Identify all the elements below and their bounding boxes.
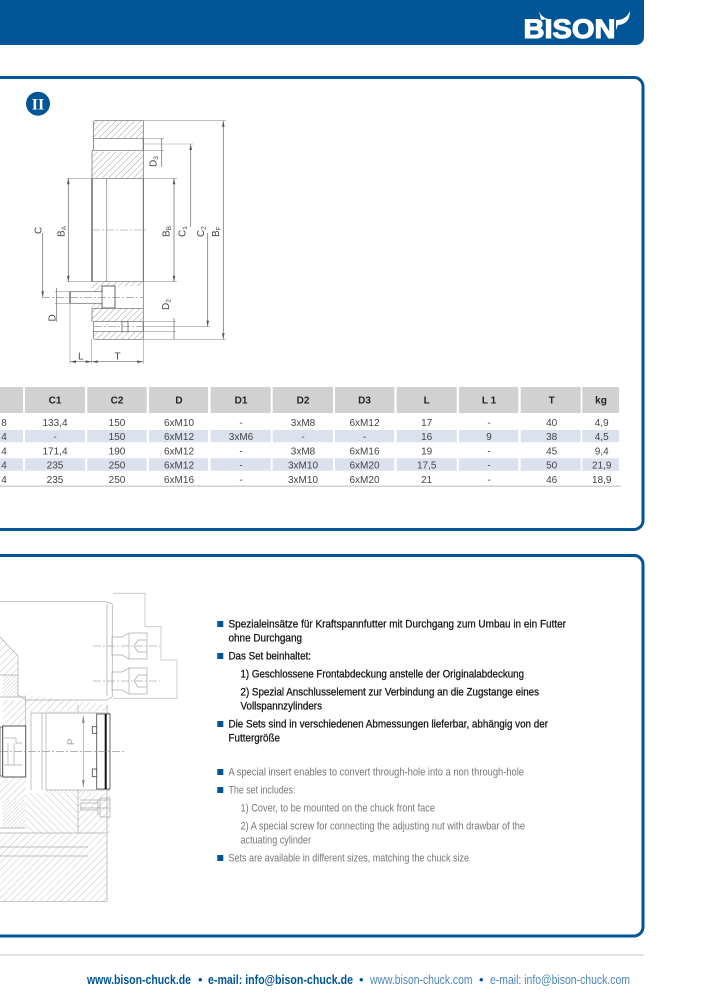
dimension labels: T [114,352,121,362]
row 4: 6xM20 [349,460,380,472]
header bar [0,0,644,45]
row 1: - [487,418,491,429]
row 5: 6xM20 [349,475,380,486]
dimension labels: B [162,230,172,237]
row 1: 17 [421,418,433,429]
row 3: 6xM12 [164,446,194,457]
technical drawing: chuck section [42,121,148,339]
footer rule [0,954,644,956]
row 2: - [53,432,57,443]
row 3: 190 [109,446,126,457]
row 2: - [301,432,305,443]
row 4: 6xM12 [164,460,194,472]
dimension labels: 1 [182,226,189,230]
footer links: e-mail: info@bison-chuck.de [208,972,353,987]
table header: T [549,396,555,406]
row 3: 3xM8 [291,446,316,457]
dimension labels: F [216,226,222,230]
English lines: A special insert enables to convert through-hole into a non through-hole [228,766,524,778]
English lines: Sets are available in different sizes, matching the chuck size [228,852,469,864]
table header: C2 [111,396,124,406]
badge: II: II [32,96,44,114]
row 3: 45 [546,446,558,457]
jaw screws [93,633,160,694]
row 2: 150 [109,432,126,443]
row 1: 4,9 [595,418,609,429]
row 2: 4,5 [595,432,609,443]
German lines: ohne Durchgang [228,633,302,645]
dimension labels: A [61,225,68,230]
bullet [217,769,223,775]
panel: description [0,556,643,936]
German lines: Vollspannzylinders [240,700,322,712]
German lines: 1) Geschlossene Frontabdeckung anstelle der Originalabdeckung [240,669,524,681]
chuck outlines [0,602,112,902]
table header: D [175,396,183,406]
dimension P: P [66,739,77,745]
connecting screw [0,726,26,777]
footer links: • [359,972,364,987]
dimension labels: 2 [200,226,208,230]
row 1: - [239,418,243,429]
row 1: 8 [1,418,7,429]
row 1: 6xM10 [164,418,194,429]
row 1: 133,4 [42,418,68,429]
bullet [217,653,223,659]
row 3: - [239,446,243,457]
table header: L 1 [482,396,497,406]
footer links: www.bison-chuck.com [369,972,472,987]
panel: dimensions [0,78,643,530]
row 4: 250 [109,460,126,472]
English lines: 1) Cover, to be mounted on the chuck front face [240,802,435,814]
hatched body sections [0,637,112,902]
dimension labels: D [48,314,58,322]
German lines: Futtergröße [228,733,280,745]
row 2: 4 [1,432,7,443]
footer links: www.bison-chuck.de [86,972,191,987]
table header [0,387,619,413]
bullet [217,621,223,627]
row 5: 21 [421,475,433,486]
row 4: 21,9 [592,460,612,472]
badge: II [26,92,50,116]
black insert cover [92,714,110,789]
row 5: 250 [109,475,126,486]
bullet [217,721,223,727]
dimension P [66,715,85,788]
English lines: actuating cylinder [240,834,311,846]
row 3: 171,4 [42,446,68,457]
row 2: - [363,432,366,443]
dimension labels: 2 [166,299,172,303]
English lines: The set includes: [228,784,296,796]
row 2: 9 [486,432,492,443]
bullet [217,855,223,861]
table header: kg [595,396,607,406]
table header: D1 [235,396,248,406]
dimension labels: C [34,227,44,234]
row 4: 50 [546,460,558,472]
row 2 [1,432,609,443]
row 1 [1,418,609,429]
row 2: 38 [546,432,558,443]
row 4: 3xM10 [288,460,318,472]
row 3: - [487,446,491,457]
row 5: 46 [546,475,558,486]
row 3: 19 [421,446,433,457]
table header: L [424,396,430,406]
row 5: 3xM10 [288,475,318,486]
table header: D3 [358,396,371,406]
footer links [86,972,630,987]
row 3: 6xM16 [349,446,380,457]
row 3: 9,4 [595,446,609,457]
German lines: Das Set beinhaltet: [228,651,311,663]
dimension labels: B [166,226,173,230]
small bolt [80,798,110,817]
dimension labels [34,156,222,362]
jaw outline [113,593,177,698]
dimension lines [41,121,226,364]
text block: English [217,766,525,864]
row 3 [1,446,609,457]
row 4: 4 [1,460,7,472]
row 3: 4 [1,446,7,457]
row 4 [1,460,612,472]
row 1: 3xM8 [291,418,316,429]
row 5: - [239,475,243,486]
technical drawing: chuck assembly [0,593,177,902]
row 5: 4 [1,475,7,486]
dimension labels: L [78,352,84,362]
table header: D2 [297,396,310,406]
footer links: • [198,972,203,987]
text block: German [217,619,566,745]
row 2: 16 [421,432,433,443]
table header: C1 [49,396,62,406]
German lines: 2) Spezial Anschlusselement zur Verbindung an die Zugstange eines [240,687,539,699]
table: dimensions [0,387,621,487]
German lines: Die Sets sind in verschiedenen Abmessungen lieferbar, abhängig von der [228,718,548,730]
row 1: 150 [109,418,126,429]
table row shading [0,430,619,471]
dimension labels: D [161,303,172,310]
centre line [0,750,125,752]
dimension labels: C [196,230,207,237]
row 2: 6xM12 [164,432,194,443]
logo: BISON: BISON [524,14,616,44]
English lines: 2) A special screw for connecting the adjusting nut with drawbar of the [240,820,525,832]
row 5 [1,475,612,486]
row 4: - [487,460,491,472]
row 4: 235 [47,460,64,472]
row 4: 17,5 [417,460,437,472]
row 5: 235 [47,475,64,486]
German lines [228,619,566,745]
bullet [217,787,223,793]
row 5: 6xM16 [164,475,194,486]
dimension labels: D [148,160,160,167]
row 5: - [487,475,491,486]
German lines: Spezialeinsätze für Kraftspannfutter mit Durchgang zum Umbau in ein Futter [228,619,566,631]
dimension labels: C [178,230,188,237]
footer links: • [479,972,484,987]
row 1: 6xM12 [349,418,380,429]
dimension labels: B [56,230,68,237]
footer links: e-mail: info@bison-chuck.com [490,972,630,987]
row 4: - [239,460,243,472]
dimension labels: B [211,230,222,237]
English lines [228,766,525,864]
row 2: 3xM6 [229,432,254,443]
row 5: 18,9 [592,475,612,486]
row 1: 40 [546,418,558,429]
dimension labels: 3 [153,156,160,160]
